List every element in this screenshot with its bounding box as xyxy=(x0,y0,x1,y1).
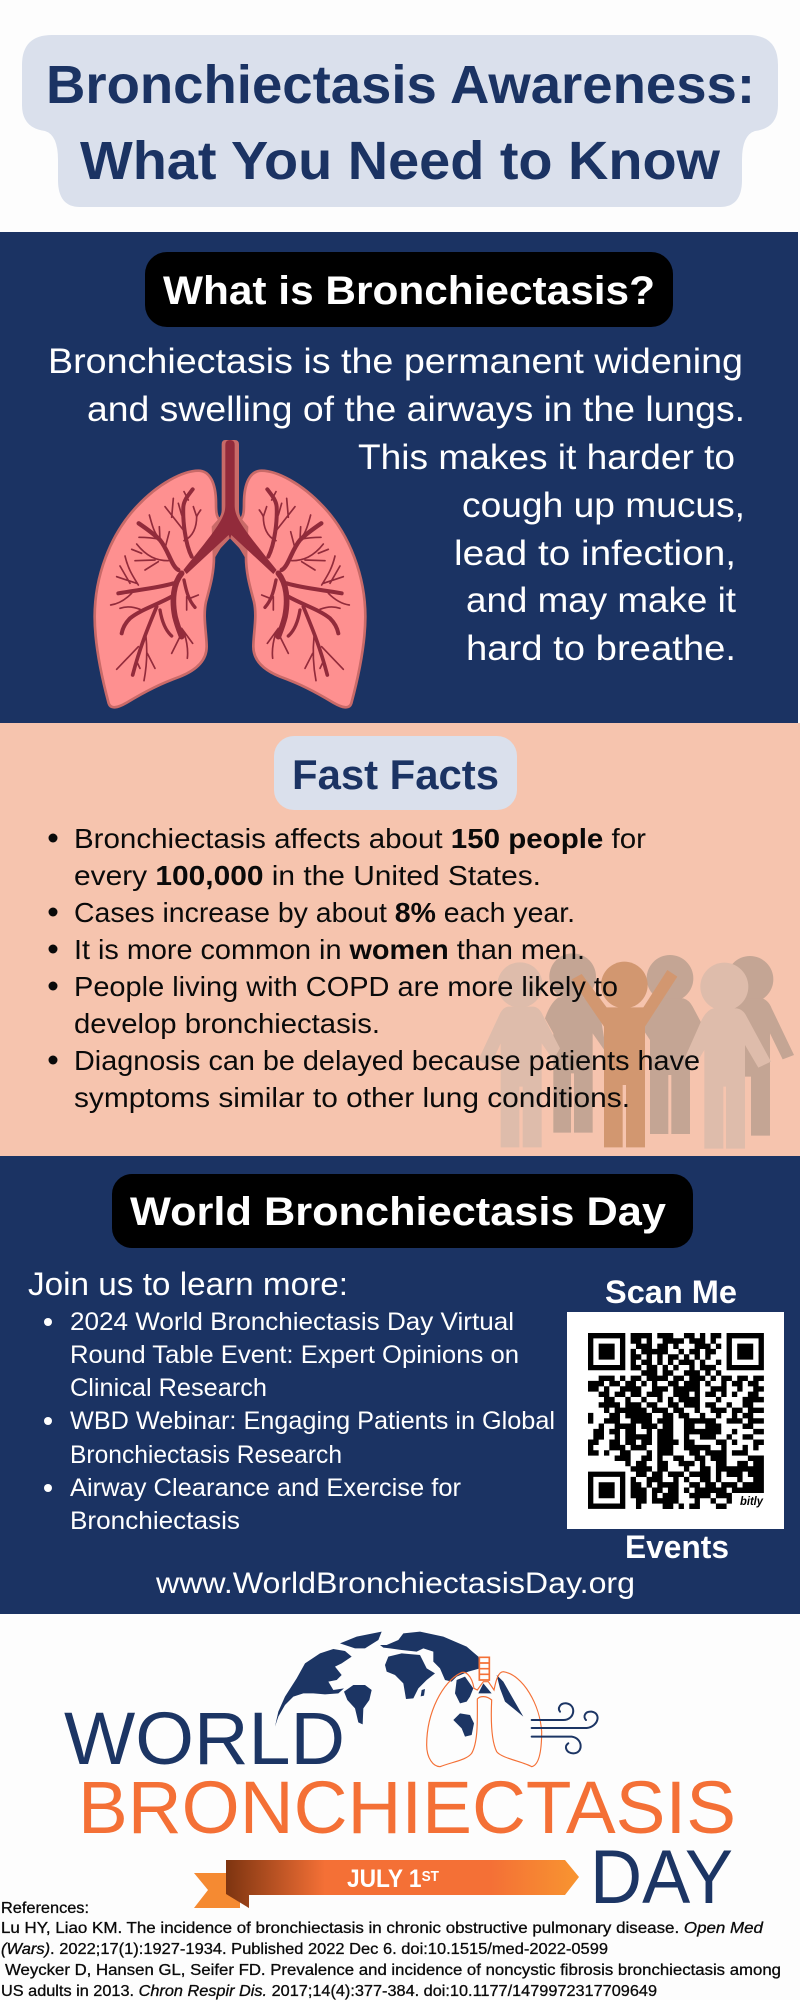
text block: definition: Bronchiectasis is the permanent widening xyxy=(48,342,743,381)
title: Bronchiectasis Awareness: xyxy=(46,55,755,115)
list: events: Bronchiectasis Research xyxy=(70,1441,342,1469)
text block: definition: This makes it harder to xyxy=(358,438,735,477)
illustration: group of people xyxy=(478,953,794,1149)
icon: wind xyxy=(532,1703,598,1753)
references: US adults in 2013. Chron Respir Dis. 2017;14(4):377-384. doi:10.1177/1479972317709649 xyxy=(1,1983,657,2000)
title: What You Need to Know xyxy=(80,131,721,191)
text block: definition: hard to breathe. xyxy=(466,629,736,668)
references xyxy=(1,1900,781,2000)
text block: definition: lead to infection, xyxy=(454,534,736,573)
references: (Wars). 2022;17(1):1927-1934. Published 2022 Dec 6. doi:10.1515/med-2022-0599 xyxy=(1,1941,608,1958)
list: events: Bronchiectasis xyxy=(70,1507,240,1535)
heading: what is bronchiectasis xyxy=(145,252,673,327)
heading: fast facts xyxy=(274,736,517,810)
wordmark: world: WORLD xyxy=(64,1697,345,1780)
heading: world bronchiectasis day: World Bronchiectasis Day xyxy=(130,1190,667,1234)
references: Weycker D, Hansen GL, Seifer FD. Prevalence and incidence of noncystic fibrosis bronchiectasis among xyxy=(5,1962,781,1979)
list: events: WBD Webinar: Engaging Patients in Global xyxy=(70,1407,555,1435)
ribbon: july 1st: ST xyxy=(422,1868,439,1885)
panel: fast facts xyxy=(0,723,800,1156)
ribbon: july 1st: JULY 1 xyxy=(347,1865,429,1893)
icon: lungs xyxy=(95,440,365,707)
list: events: Airway Clearance and Exercise for xyxy=(70,1474,461,1502)
text block: definition: and may make it xyxy=(466,581,736,620)
text block: definition: cough up mucus, xyxy=(462,486,745,525)
list: facts: develop bronchiectasis. xyxy=(74,1008,380,1039)
logo: world bronchiectasis day xyxy=(64,1632,736,1920)
qr code: bitly xyxy=(740,1494,764,1508)
heading: world bronchiectasis day xyxy=(112,1174,693,1248)
list: facts: People living with COPD are more likely to xyxy=(74,971,618,1002)
list: facts: It is more common in women than men. xyxy=(74,934,585,965)
list: facts xyxy=(48,823,700,1113)
wordmark: bronchiectasis: BRONCHIECTASIS xyxy=(78,1766,736,1849)
references: Lu HY, Liao KM. The incidence of bronchiectasis in chronic obstructive pulmonary disease. Open Med xyxy=(1,1920,764,1937)
heading: fast facts: Fast Facts xyxy=(292,751,499,798)
text block: definition xyxy=(48,342,745,668)
qr code xyxy=(567,1312,784,1529)
list: events: 2024 World Bronchiectasis Day Virtual xyxy=(70,1308,514,1336)
text: join us: Join us to learn more: xyxy=(28,1266,348,1302)
title xyxy=(22,35,778,207)
heading: what is bronchiectasis: What is Bronchiectasis? xyxy=(163,269,655,313)
ribbon: july 1st xyxy=(194,1860,579,1908)
references: References: xyxy=(1,1900,89,1917)
wordmark: day: DAY xyxy=(590,1835,733,1920)
label: scan me: Scan Me xyxy=(605,1274,737,1310)
label: events: Events xyxy=(625,1529,729,1565)
list: facts: Diagnosis can be delayed because patients have xyxy=(74,1045,700,1076)
list: facts: Bronchiectasis affects about 150 people for xyxy=(74,823,646,854)
text: website url: www.WorldBronchiectasisDay.org xyxy=(155,1567,635,1600)
list: events xyxy=(44,1308,555,1535)
icon: lung outline xyxy=(427,1657,542,1767)
text block: definition: and swelling of the airways in the lungs. xyxy=(87,390,745,429)
icon: globe xyxy=(275,1632,523,1737)
list: facts: Cases increase by about 8% each year. xyxy=(74,897,575,928)
list: events: Clinical Research xyxy=(70,1374,267,1402)
panel: what is bronchiectasis xyxy=(0,232,798,723)
list: facts: symptoms similar to other lung conditions. xyxy=(74,1082,630,1113)
list: events: Round Table Event: Expert Opinions on xyxy=(70,1341,519,1369)
panel: world bronchiectasis day xyxy=(0,1156,800,1614)
list: facts: every 100,000 in the United States. xyxy=(74,860,541,891)
